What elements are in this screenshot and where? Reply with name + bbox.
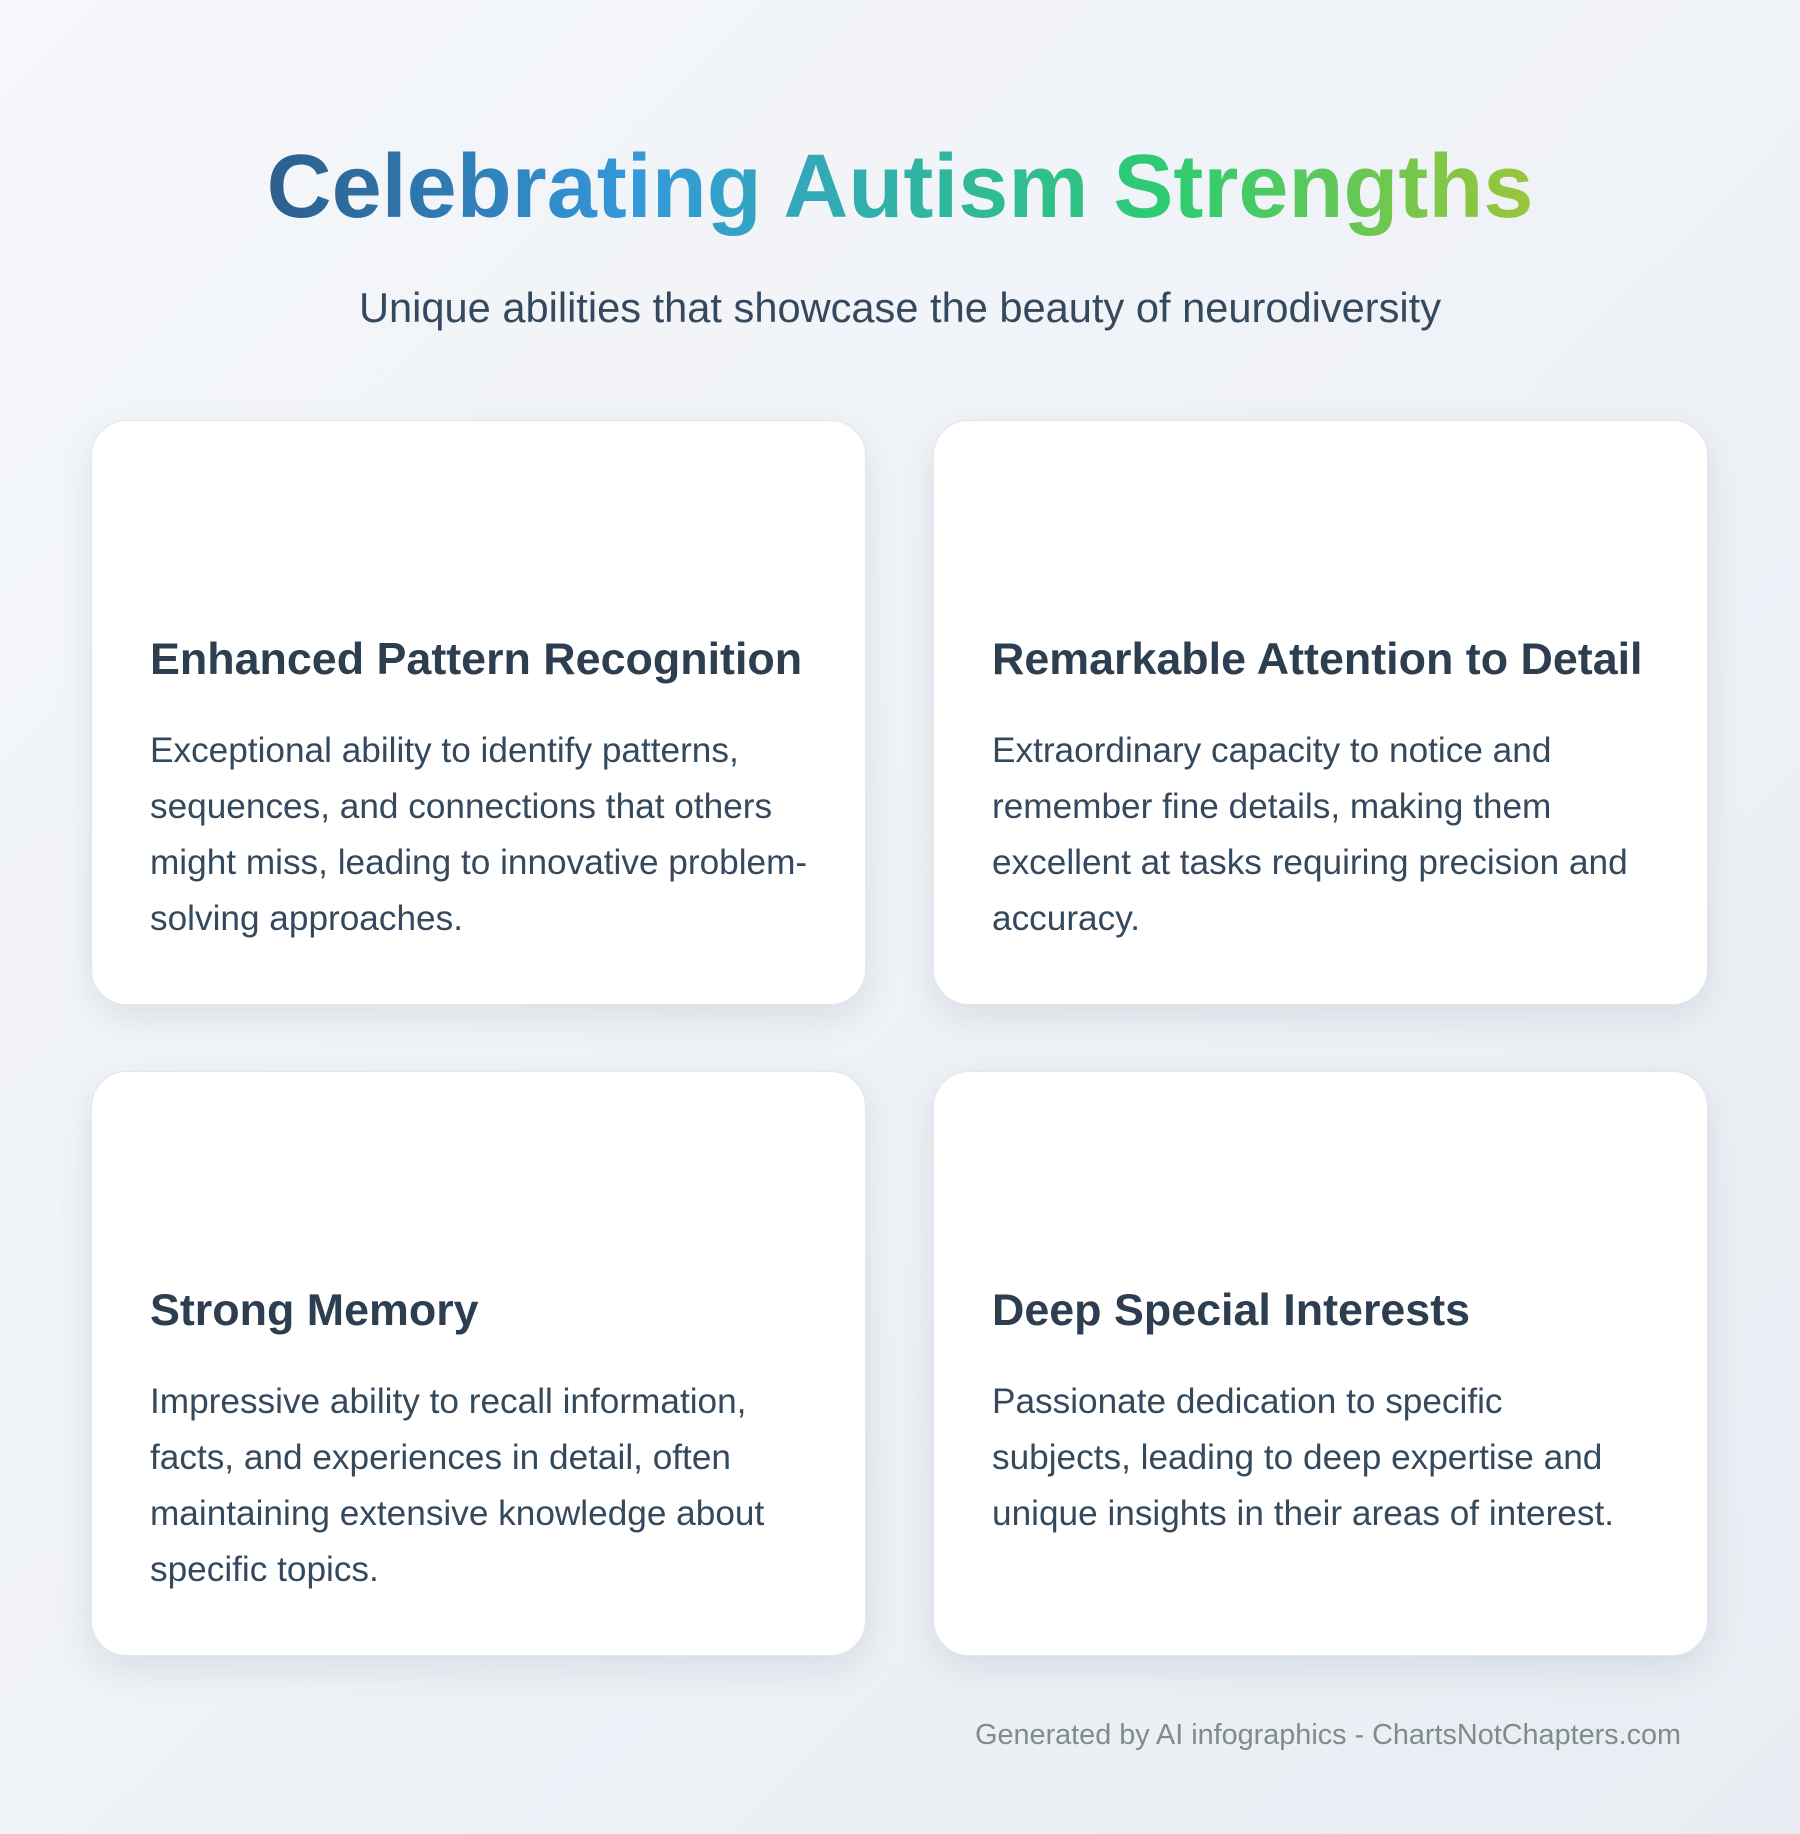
text block: Passionate dedication to specific [992,1382,1503,1421]
text block: Exceptional ability to identify patterns, sequences, and connections that others might miss, leading to innovative problem-solving approaches. [150,731,807,938]
heading: Enhanced Pattern Recognition [150,634,802,684]
title [0,132,1800,242]
subtitle: Unique abilities that showcase the beauty of neurodiversity [359,284,1441,331]
heading: Strong Memory [150,1285,479,1335]
text block [992,1382,1614,1533]
footer: Generated by AI infographics - ChartsNotChapters.com [975,1719,1681,1751]
heading: Deep Special Interests [992,1285,1470,1335]
panel: pattern recognition [91,420,866,1005]
text block: subjects, leading to deep expertise and unique insights in their areas of interest. [992,1438,1614,1533]
panel: attention to detail [933,420,1708,1005]
text block: Extraordinary capacity to notice and remember fine details, making them excellent at tasks requiring precision and accuracy. [992,731,1628,938]
panel: special interests [933,1071,1708,1656]
text block: Impressive ability to recall information, facts, and experiences in detail, often maintaining extensive knowledge about specific topics. [150,1382,764,1589]
title: Celebrating Autism Strengths [267,137,1533,237]
heading: Remarkable Attention to Detail [992,634,1642,684]
panel: strong memory [91,1071,866,1656]
